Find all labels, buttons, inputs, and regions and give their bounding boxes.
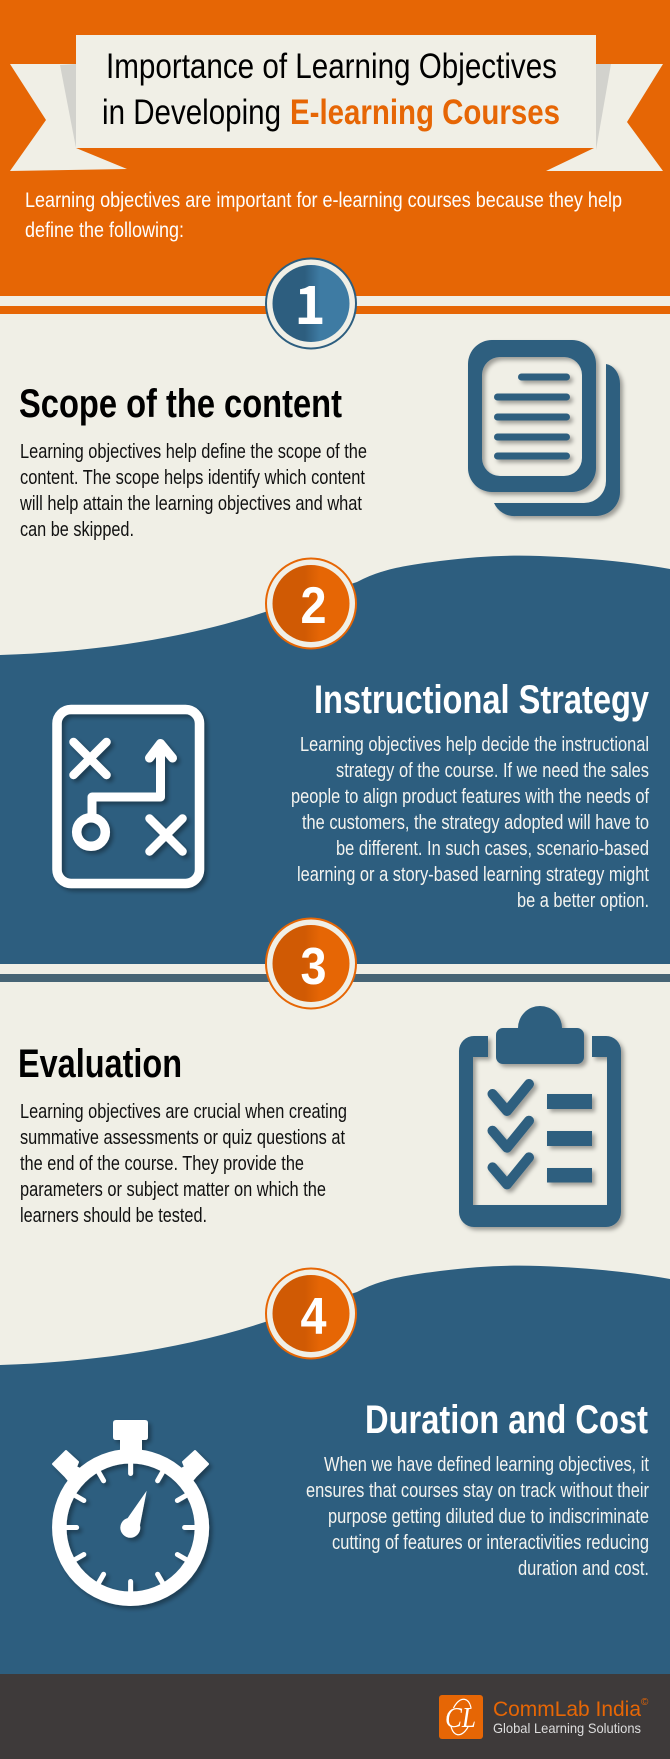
body text: scope bbox=[19, 441, 367, 541]
body text: scope: will help attain the learning objectives and what bbox=[19, 493, 362, 515]
body text: evaluation: parameters or subject matter on which the bbox=[20, 1179, 326, 1201]
logo text: CommLab India bbox=[493, 1698, 641, 1721]
number badge 3 bbox=[266, 918, 356, 1008]
body text: scope: Learning objectives help define the scope of the bbox=[20, 441, 367, 463]
icon: clipboard checklist bbox=[459, 1006, 621, 1227]
logo mark: CL: CL bbox=[445, 1703, 476, 1734]
logo text: Global Learning Solutions bbox=[493, 1720, 641, 1736]
panel: header bbox=[0, 0, 670, 314]
number badge 4: 4 bbox=[300, 1288, 327, 1346]
title: in Developing bbox=[102, 93, 281, 132]
number badge 2 bbox=[266, 558, 356, 648]
title: E-learning Courses bbox=[290, 93, 560, 132]
number badge 3: 3 bbox=[300, 938, 326, 996]
icon: stopwatch bbox=[53, 1420, 208, 1599]
title: Importance of Learning Objectives bbox=[106, 47, 557, 86]
icon: strategy board bbox=[57, 710, 200, 884]
panel: evaluation bbox=[18, 1006, 621, 1227]
number badge 1 bbox=[266, 258, 356, 348]
body text: evaluation: learners should be tested. bbox=[20, 1205, 207, 1227]
body text: scope: can be skipped. bbox=[20, 519, 134, 541]
logo mark: CL bbox=[439, 1695, 483, 1739]
body text: evaluation bbox=[20, 1101, 347, 1227]
blue wave background bbox=[0, 556, 670, 964]
body text: evaluation: summative assessments or quiz questions at bbox=[20, 1127, 345, 1149]
logo text: © bbox=[641, 1697, 649, 1708]
number badge 2: 2 bbox=[300, 577, 326, 635]
blue wave background bbox=[0, 1266, 670, 1674]
body text: evaluation: the end of the course. They provide the bbox=[20, 1153, 304, 1175]
icon: documents bbox=[468, 340, 620, 516]
panel: scope of the content bbox=[19, 340, 620, 541]
body text: evaluation: Learning objectives are crucial when creating bbox=[20, 1101, 347, 1123]
panel: footer bbox=[0, 1674, 670, 1759]
number badge 4 bbox=[266, 1268, 356, 1358]
ribbon banner bbox=[10, 35, 663, 171]
intro text: define the following: bbox=[25, 219, 184, 242]
heading: scope of the content: Scope of the content bbox=[19, 382, 342, 426]
title bbox=[102, 47, 560, 132]
intro text bbox=[25, 189, 622, 242]
number badge 1: 1 bbox=[294, 264, 326, 340]
body text: strategy bbox=[291, 734, 649, 912]
body text: scope: content. The scope helps identify which content bbox=[20, 467, 365, 489]
divider stripes bbox=[0, 964, 670, 982]
logo text bbox=[493, 1697, 649, 1736]
panel: instructional strategy bbox=[0, 556, 670, 982]
panel: duration and cost bbox=[0, 1266, 670, 1674]
body text: duration bbox=[306, 1454, 649, 1580]
heading: evaluation: Evaluation bbox=[18, 1042, 182, 1086]
